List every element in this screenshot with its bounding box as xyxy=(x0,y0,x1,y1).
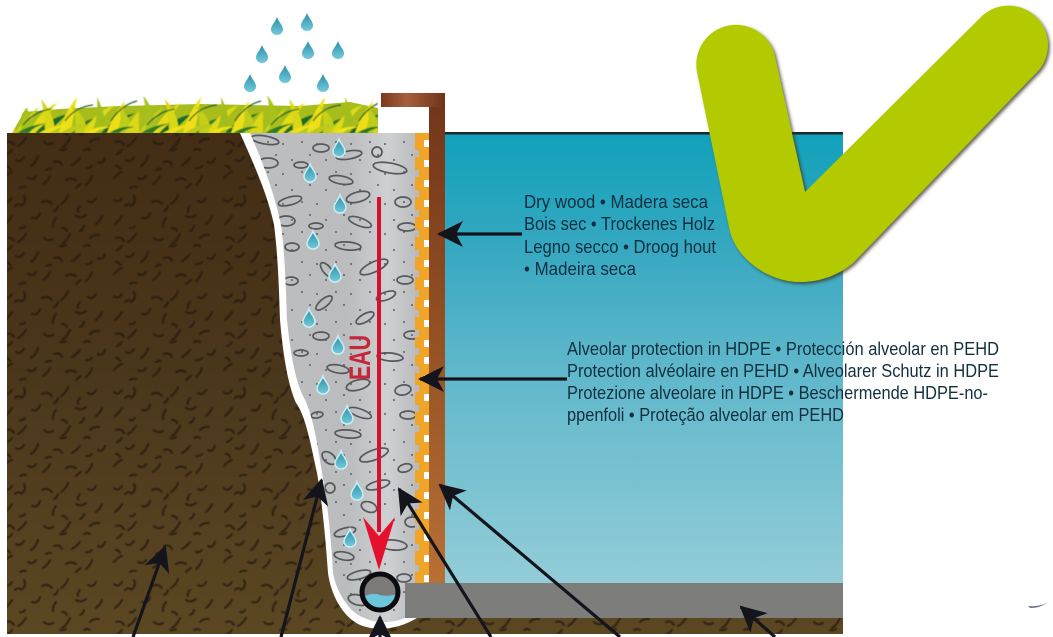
text: alveolar protection xyxy=(567,339,999,425)
text: dry wood: Dry wood • Madera seca xyxy=(524,192,709,212)
grass xyxy=(12,93,378,133)
arrow: drain pipe xyxy=(378,617,382,637)
text: alveolar protection: Protection alvéolaire en PEHD • Alveolarer Schutz in HDPE xyxy=(567,361,999,381)
text: dry wood: Bois sec • Trockenes Holz xyxy=(524,214,715,234)
arrow: wall xyxy=(440,485,620,637)
arrow: gravel xyxy=(399,489,491,637)
arrow: soil xyxy=(133,547,165,637)
check mark xyxy=(696,6,1048,282)
text: alveolar protection: Protezione alveolare in HDPE • Beschermende HDPE-no- xyxy=(567,383,988,403)
arrow: dry wood xyxy=(439,232,522,236)
text: dry wood: Legno secco • Droog hout xyxy=(524,237,716,257)
label: EAU: EAU xyxy=(344,335,377,380)
arrow: alveolar protection xyxy=(420,377,567,381)
arrow: membrane xyxy=(281,480,322,637)
text: alveolar protection: Alveolar protection in HDPE • Protección alveolar en PEHD xyxy=(567,339,999,359)
text: dry wood xyxy=(524,192,716,279)
dry wood xyxy=(381,93,445,583)
small mark xyxy=(1028,603,1047,608)
text: alveolar protection: ppenfoli • Proteção alveolar em PEHD xyxy=(567,405,844,425)
arrows xyxy=(133,234,775,637)
water-side backdrop xyxy=(445,132,843,583)
drain pipe xyxy=(362,574,398,610)
gravel backfill xyxy=(250,133,415,622)
text: dry wood: • Madeira seca xyxy=(524,259,637,279)
alveolar HDPE protection xyxy=(415,133,430,583)
arrow: slab xyxy=(741,607,775,637)
rain drops xyxy=(244,13,344,92)
filter membrane (white band) xyxy=(240,133,417,629)
soil xyxy=(7,133,843,634)
water flow arrow xyxy=(363,197,395,570)
concrete slab xyxy=(405,583,843,618)
